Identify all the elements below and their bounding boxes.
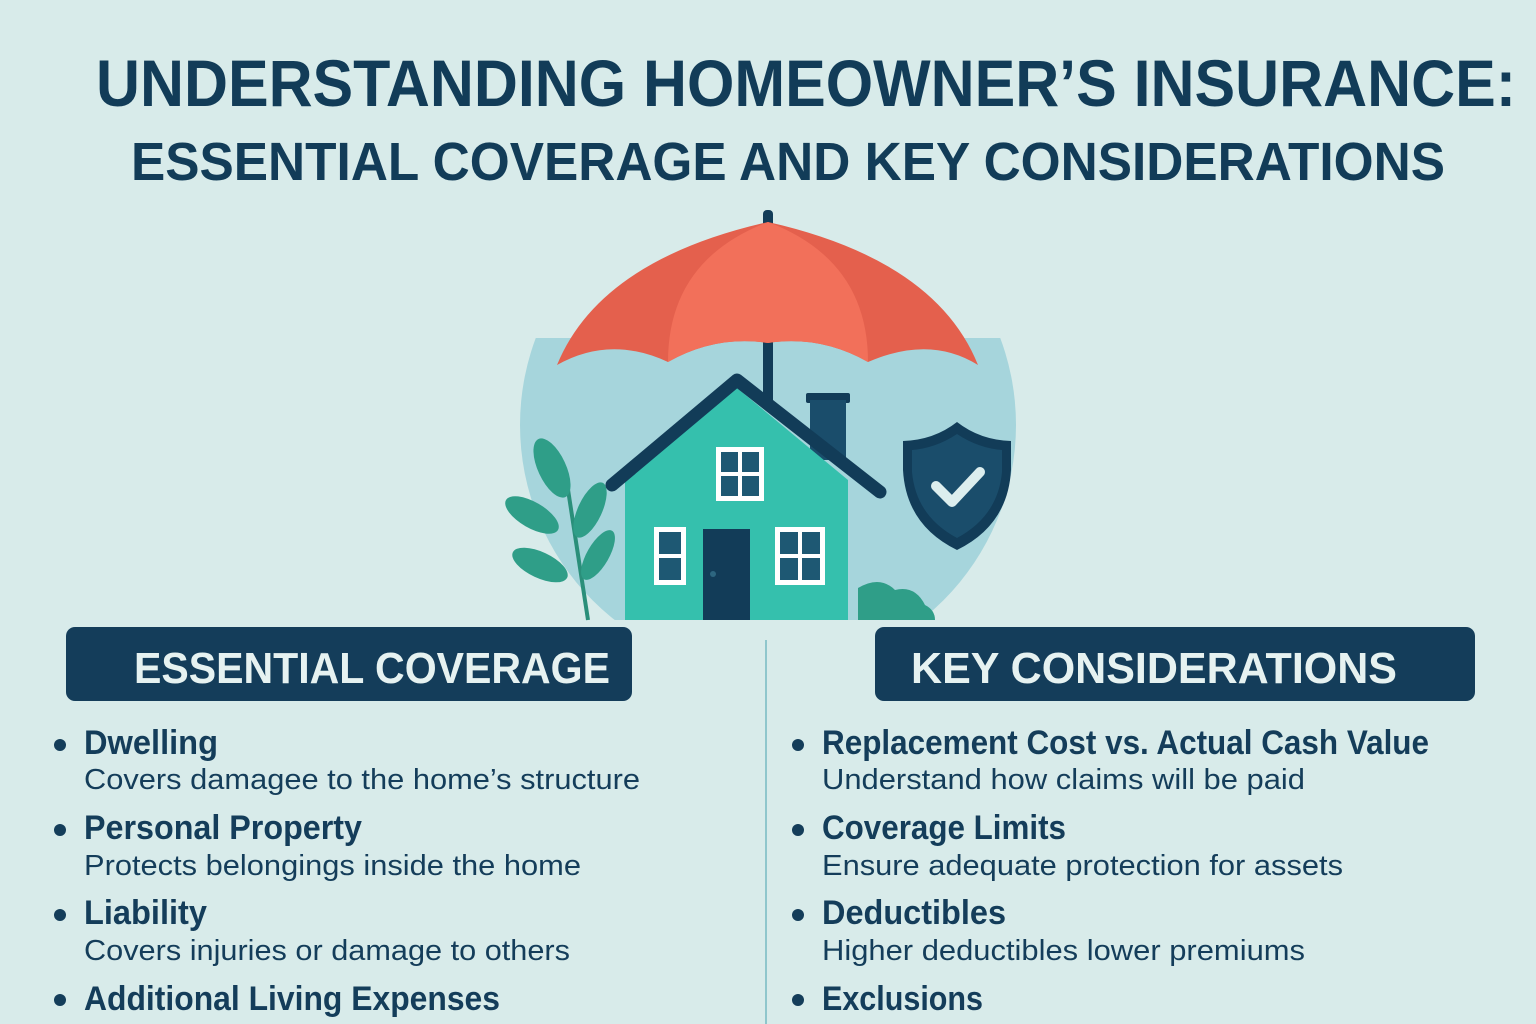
list: consideration items: Exclusions bbox=[822, 980, 983, 1018]
list: coverage items: Dwelling bbox=[84, 724, 218, 762]
heading: key considerations: KEY CONSIDERATIONS bbox=[911, 644, 1397, 693]
list: coverage items bbox=[54, 724, 640, 1018]
list: coverage items: Covers injuries or damage to others bbox=[84, 935, 570, 967]
divider bbox=[765, 640, 767, 1024]
icon: house bbox=[612, 380, 880, 620]
list: coverage items: Additional Living Expenses bbox=[84, 980, 500, 1018]
list: consideration items bbox=[792, 724, 1429, 1018]
list: consideration items: Replacement Cost vs. Actual Cash Value bbox=[822, 724, 1429, 762]
icon: shield check bbox=[903, 422, 1011, 550]
list: coverage items: Covers damagee to the home’s structure bbox=[84, 764, 640, 796]
list: consideration items: Deductibles bbox=[822, 894, 1006, 932]
icon: umbrella bbox=[557, 210, 978, 410]
list: consideration items: Ensure adequate protection for assets bbox=[822, 850, 1343, 882]
title bbox=[96, 46, 1516, 192]
list: coverage items: Liability bbox=[84, 894, 207, 932]
list: consideration items: Higher deductibles lower premiums bbox=[822, 935, 1305, 967]
panel: key considerations bbox=[792, 627, 1475, 1018]
heading: essential coverage bbox=[66, 627, 632, 701]
list: consideration items: Understand how claims will be paid bbox=[822, 764, 1305, 796]
icon: plant bbox=[500, 433, 622, 620]
icon: bush bbox=[858, 582, 935, 620]
list: coverage items: Personal Property bbox=[84, 809, 362, 847]
panel: essential coverage bbox=[54, 627, 640, 1018]
list: coverage items: Protects belongings inside the home bbox=[84, 850, 581, 882]
heading: essential coverage: ESSENTIAL COVERAGE bbox=[134, 644, 610, 693]
illustration: house under umbrella bbox=[505, 210, 1016, 620]
list: consideration items: Coverage Limits bbox=[822, 809, 1066, 847]
title: ESSENTIAL COVERAGE AND KEY CONSIDERATIONS bbox=[131, 132, 1445, 192]
heading: key considerations bbox=[875, 627, 1475, 701]
